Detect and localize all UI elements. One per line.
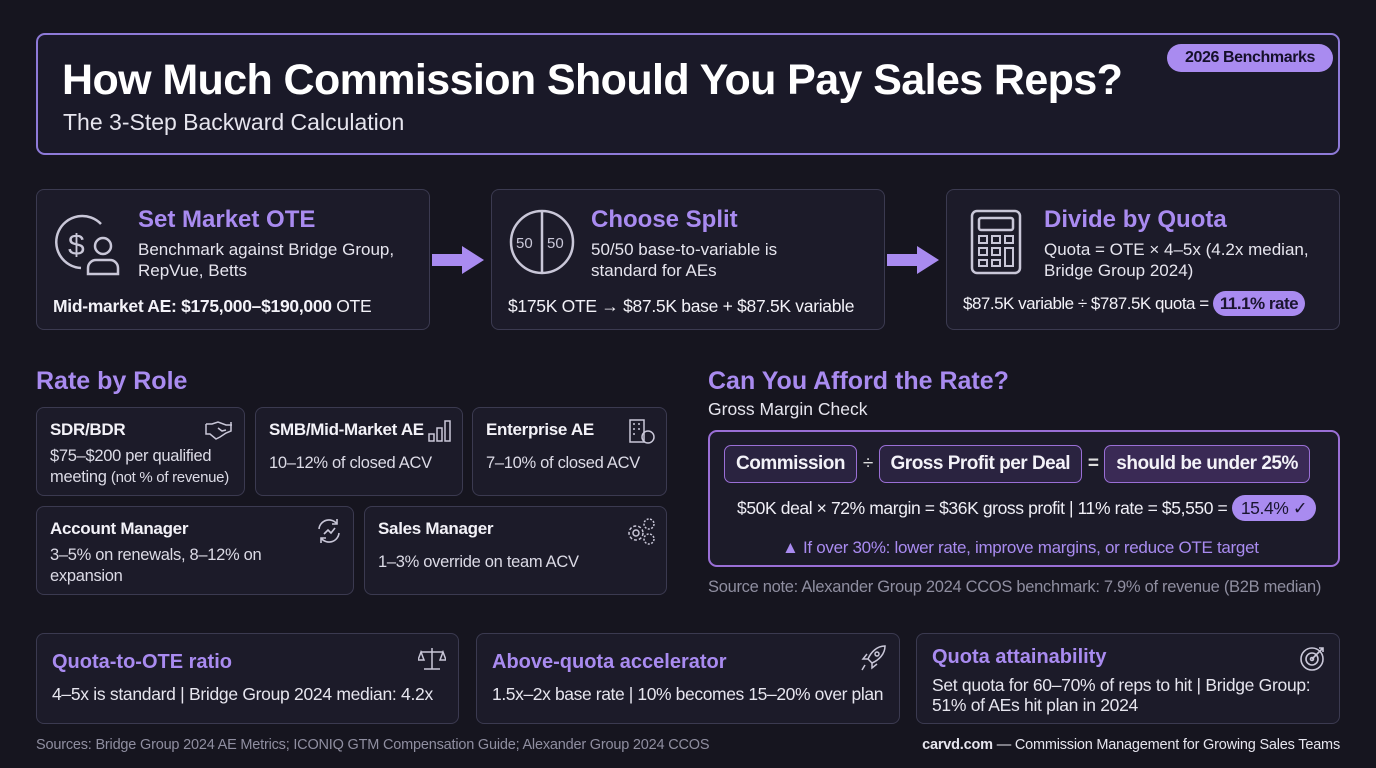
role: account manager: expansion (50, 567, 123, 585)
text (591, 240, 777, 280)
stat: $175K OTE → $87.5K base + $87.5K variable (508, 296, 854, 316)
bottom card: quota-to-ote (36, 633, 459, 724)
text: Quota = OTE × 4–5x (4.2x median, (1044, 240, 1309, 259)
icon: building (629, 419, 655, 444)
bottom card: attainability: Quota attainability (932, 646, 1106, 668)
text: standard for AEs (591, 261, 717, 280)
icon: dollar person (55, 214, 120, 276)
heading: rate by role: Rate by Role (36, 367, 187, 395)
bottom card: quota-to-ote: 4–5x is standard | Bridge Group 2024 median: 4.2x (52, 684, 433, 704)
role: sales manager (364, 506, 667, 595)
role: enterprise: 7–10% of closed ACV (486, 454, 640, 472)
title: How Much Commission Should You Pay Sales Reps? (62, 56, 1122, 104)
bottom card: attainability: Set quota for 60–70% of reps to hit | Bridge Group: (932, 675, 1310, 695)
badge (1167, 44, 1333, 72)
example calc: $50K deal × 72% margin = $36K gross profit | 11% rate = $5,550 = 15.4% ✓ (737, 498, 1307, 518)
text (138, 240, 394, 280)
icon: handshake (205, 421, 232, 440)
bottom card: quota-to-ote: Quota-to-OTE ratio (52, 651, 232, 673)
header panel (36, 33, 1340, 155)
role: SMB: SMB/Mid-Market AE (269, 420, 424, 439)
arrow 1 (432, 246, 484, 274)
formula row: should be under 25% (1116, 453, 1298, 474)
formula row (724, 445, 1310, 483)
icon: calculator (970, 210, 1022, 274)
icon: scale (418, 648, 446, 670)
step 1 card (36, 189, 430, 330)
step 3 card (946, 189, 1340, 330)
icon: dollar person: $ (68, 229, 85, 262)
role: enterprise (472, 407, 667, 496)
text: RepVue, Betts (138, 261, 247, 280)
footer sources: Sources: Bridge Group 2024 AE Metrics; ICONIQ GTM Compensation Guide; Alexander Group 2024 CCOS (36, 737, 709, 753)
role: SDR/BDR: $75–$200 per qualified (50, 447, 211, 465)
role: account manager: Account Manager (50, 519, 188, 538)
subtitle: The 3-Step Backward Calculation (63, 109, 404, 135)
icon: split circle: 50 (516, 235, 533, 252)
icon: bars (428, 420, 451, 442)
text: Benchmark against Bridge Group, (138, 240, 394, 259)
subheading: Gross Margin Check (708, 399, 868, 419)
text: Bridge Group 2024) (1044, 261, 1193, 280)
icon: split circle: 50 (547, 235, 564, 252)
icon: refresh (318, 519, 340, 543)
step 2 card (491, 189, 885, 330)
formula row: Gross Profit per Deal (891, 453, 1070, 474)
text: 50/50 base-to-variable is (591, 240, 777, 259)
text (1044, 240, 1309, 280)
warning: ▲ If over 30%: lower rate, improve margins, or reduce OTE target (782, 538, 1259, 557)
badge: 2026 Benchmarks (1185, 49, 1315, 66)
role: SDR/BDR: meeting (not % of revenue) (50, 468, 229, 486)
stat: Mid-market AE: $175,000–$190,000 OTE (53, 296, 371, 316)
role: SDR/BDR (36, 407, 245, 496)
icon: rocket (861, 645, 886, 670)
panel: gross margin formula (708, 430, 1340, 567)
role: enterprise: Enterprise AE (486, 420, 594, 439)
bottom card: accelerator: 1.5x–2x base rate | 10% becomes 15–20% over plan (492, 684, 883, 704)
arrow 2 (887, 246, 939, 274)
role: sales manager: 1–3% override on team ACV (378, 553, 579, 571)
role: SMB: 10–12% of closed ACV (269, 454, 432, 472)
icon: gears (628, 518, 655, 545)
role: SMB (255, 407, 463, 496)
formula row: ÷ = (863, 453, 1098, 474)
icon: split circle (510, 210, 574, 274)
bottom card: accelerator: Above-quota accelerator (492, 651, 727, 673)
heading: can you afford: Can You Afford the Rate? (708, 367, 1009, 395)
bottom card: accelerator (476, 633, 900, 724)
role: sales manager: Sales Manager (378, 519, 493, 538)
heading: Divide by Quota (1044, 206, 1227, 233)
role: account manager: 3–5% on renewals, 8–12% on (50, 546, 261, 564)
bottom card: attainability: 51% of AEs hit plan in 2024 (932, 695, 1138, 715)
footer brand: carvd.com — Commission Management for Growing Sales Teams (922, 737, 1340, 753)
bottom card: attainability (916, 633, 1340, 724)
heading: Choose Split (591, 206, 738, 233)
icon: target (1300, 647, 1324, 671)
formula row: Commission (736, 453, 845, 474)
stat: $87.5K variable ÷ $787.5K quota = 11.1% rate (963, 294, 1298, 313)
source note: Source note: Alexander Group 2024 CCOS benchmark: 7.9% of revenue (B2B median) (708, 578, 1321, 596)
heading: Set Market OTE (138, 206, 315, 233)
role: SDR/BDR: SDR/BDR (50, 420, 125, 439)
role: account manager (36, 506, 354, 595)
